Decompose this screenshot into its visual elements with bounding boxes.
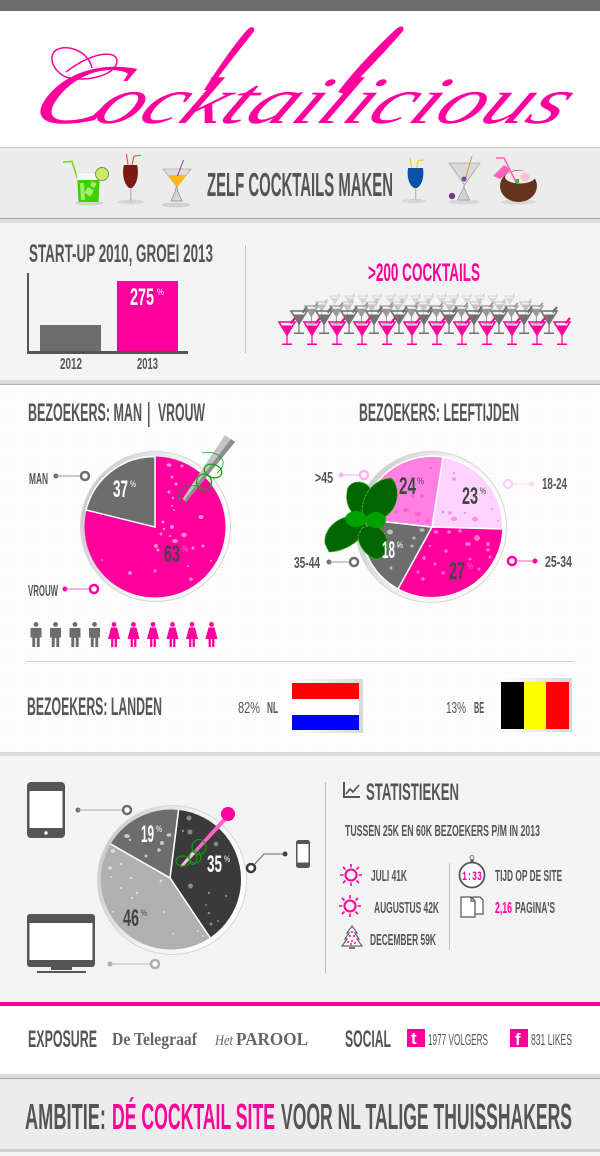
legend: over 45: >45 [315, 470, 333, 487]
ambition band: DÉ COCKTAIL SITE [112, 1096, 275, 1137]
icon: christmas tree [342, 926, 362, 949]
slice: tablet 19 [111, 810, 180, 878]
value: 37 percent: 37 [113, 476, 128, 503]
icon: stopwatch: 1:33 [462, 869, 482, 884]
pie chart: devices [97, 805, 247, 955]
panel: visitors: BE [474, 700, 484, 717]
label: 13 percent BE: 13% [446, 700, 466, 717]
panel: devices and statistics [0, 756, 600, 1002]
percent sign: % [224, 854, 230, 864]
icon: muddler with lime peel [179, 435, 235, 503]
value: 35 percent: 35 [207, 851, 222, 878]
icon: mobile phone [296, 840, 310, 868]
percent sign: % [182, 544, 188, 554]
heading: start-up: START-UP 2010, GROEI 2013 [29, 240, 213, 268]
logo: Het Parool: Het [214, 1033, 234, 1049]
icon: sun july [340, 864, 362, 886]
label: 82 percent NL: 82% [238, 700, 260, 717]
flag: Belgium [498, 678, 572, 732]
slice: vrouw 63 [84, 456, 226, 598]
heading: statistieken: STATISTIEKEN [366, 779, 459, 806]
title flourishes [52, 27, 404, 94]
icon: yellow martini [161, 160, 191, 208]
icon row: people [30, 622, 218, 647]
icon: green cocktail [63, 162, 108, 206]
icon: sun august [339, 895, 361, 917]
legend: man: MAN [29, 471, 48, 488]
flag: Netherlands [289, 679, 363, 733]
slice: desktop 46 [102, 844, 210, 950]
icon: facebook: f [515, 1030, 521, 1049]
top bar [0, 0, 600, 11]
heading: over 200 cocktails: >200 COCKTAILS [368, 259, 480, 287]
legend: desktop [108, 960, 159, 968]
slice: man 37 [86, 456, 155, 527]
text: pages per visit: PAGINA'S [515, 900, 555, 917]
logo: Het Parool: PAROOL [236, 1029, 308, 1049]
bar: 2012 [40, 325, 101, 351]
icon: coconut cocktail [493, 158, 537, 204]
legend: 35-44: 35-44 [294, 555, 320, 572]
value: 275 percent: 275 [130, 284, 154, 311]
value: 24 percent: 24 [399, 473, 416, 500]
panel: visitors: 18 [382, 537, 395, 564]
slice: 25-34 [398, 527, 503, 598]
percent sign: % [141, 908, 147, 918]
percent sign: % [156, 824, 162, 834]
pie chart: devices: 19 [141, 821, 154, 848]
label: 2012: 2012 [60, 356, 82, 373]
bar chart [27, 273, 188, 373]
heading: man vrouw: BEZOEKERS: MAN [28, 399, 142, 427]
value: 23 percent: 23 [462, 483, 478, 510]
heading: social: SOCIAL [345, 1026, 391, 1053]
panel: exposure and social [0, 1006, 600, 1074]
legend: over 45 [315, 470, 368, 487]
legend: mobile [247, 852, 288, 872]
bar: 2013 [117, 281, 178, 351]
label: 2013: 2013 [137, 356, 158, 373]
percent sign: % [480, 486, 486, 496]
panel: growth and cocktails [0, 223, 600, 380]
icon: twitter [407, 1029, 425, 1048]
panel: visitors [0, 385, 600, 752]
icon: line chart [344, 782, 360, 797]
text: december: DECEMBER 59K [370, 932, 436, 949]
title: Cocktailicious [12, 47, 600, 142]
legend: man [29, 471, 89, 488]
text: juli: JULI 41K [371, 868, 407, 885]
icon: facebook [510, 1029, 528, 1049]
logo: De Telegraaf: De Telegraaf [112, 1029, 198, 1049]
icon: monitor [27, 914, 95, 973]
icon: mint leaves [325, 478, 397, 559]
legend: 35-44 [294, 555, 358, 572]
panel: visitors: VROUW [158, 399, 205, 427]
legend: 18-24: 18-24 [542, 476, 567, 493]
percent sign: % [157, 287, 164, 297]
percent sign: % [467, 561, 473, 571]
icon: pages [461, 897, 483, 917]
percent sign: % [397, 540, 403, 550]
icon: tablet [27, 782, 65, 838]
icon: pink swizzle stick [176, 807, 235, 867]
text: pages per visit: 2,16 [495, 900, 512, 917]
legend: 25-34: 25-34 [545, 554, 572, 571]
icon: blue cocktail [402, 158, 426, 203]
icon: stopwatch [460, 856, 484, 888]
percent sign: % [417, 476, 424, 486]
header panel [0, 11, 600, 147]
text: ambitie: AMBITIE: [25, 1096, 106, 1137]
panel: visitors: BEZOEKERS: LANDEN [27, 693, 162, 721]
value: 46 percent: 46 [123, 905, 139, 932]
text: pages per visit [495, 900, 555, 917]
legend: vrouw: VROUW [28, 583, 58, 600]
icon: twitter: t [411, 1029, 417, 1048]
slice: 35-44 [361, 519, 432, 589]
slice: over 45 [362, 456, 443, 527]
percent sign: % [130, 479, 136, 489]
legend: 25-34 [508, 554, 572, 571]
icon: red cocktail [118, 154, 144, 204]
heading: exposure: EXPOSURE [28, 1026, 97, 1053]
slice: 18-24 [432, 457, 503, 529]
text: volgers: 1977 VOLGERS [428, 1032, 488, 1049]
legend: tablet [76, 806, 131, 814]
legend: 18-24 [504, 476, 567, 493]
subtitle band [0, 147, 600, 223]
slice: mobile 35 [171, 810, 241, 938]
value: 63 percent: 63 [164, 541, 180, 568]
text: augustus: AUGUSTUS 42K [374, 900, 439, 917]
icon: clear martini [449, 156, 480, 204]
pie chart: ages [356, 452, 506, 602]
label: 82 percent NL: NL [267, 700, 278, 717]
icon group: cocktail glasses [279, 294, 570, 345]
pie chart: gender [80, 452, 230, 602]
ambition band [0, 1079, 600, 1149]
value: 27 percent: 27 [449, 558, 465, 585]
